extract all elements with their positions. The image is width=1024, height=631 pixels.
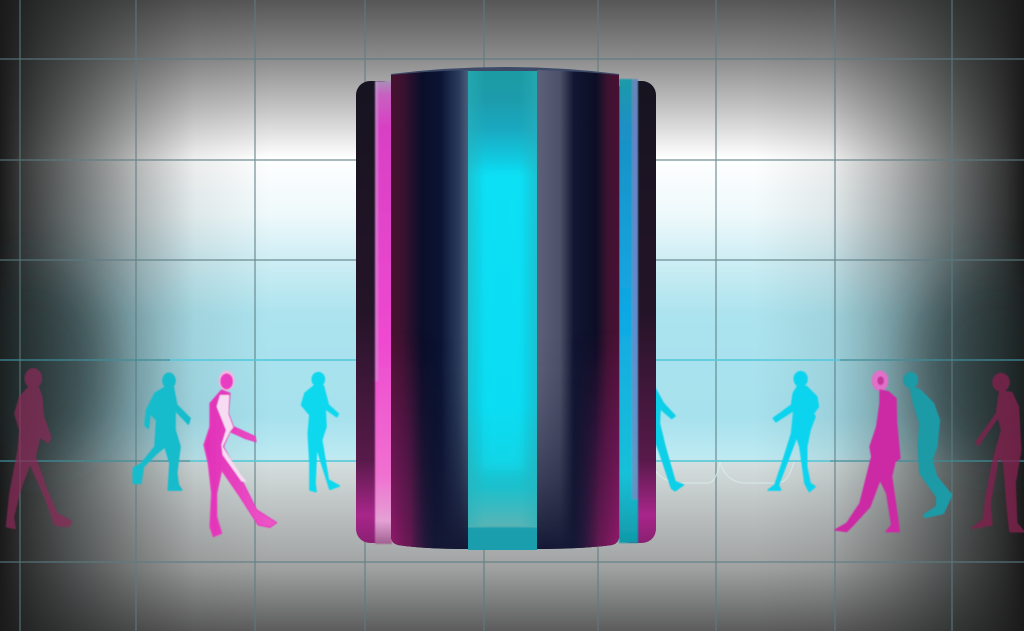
cylinder (356, 67, 656, 550)
figure: teal stander right (768, 372, 818, 492)
right edge shading (754, 0, 1024, 631)
right dark cloud (915, 270, 1024, 460)
figure: teal partial behind cylinder (655, 388, 683, 491)
figure: maroon walker far left (7, 369, 72, 528)
dark panel left (391, 70, 468, 549)
left edge shading (0, 0, 270, 631)
dark panel right (537, 70, 619, 549)
figure: teal stander left (302, 373, 339, 492)
blue strip (619, 79, 638, 543)
figure: pink walker right (835, 370, 900, 532)
left dark cloud (0, 270, 110, 460)
figure: maroon walker far right (972, 374, 1024, 532)
central cyan panel (468, 71, 537, 550)
floor panel outlines (652, 462, 794, 483)
figure: teal walker (133, 373, 190, 490)
figure: pink walker (204, 371, 277, 537)
figure: dark teal figure (904, 373, 952, 517)
magenta strip (375, 81, 392, 544)
left outer lobe (356, 81, 396, 543)
top rim (391, 67, 619, 90)
right outer lobe (616, 81, 656, 543)
